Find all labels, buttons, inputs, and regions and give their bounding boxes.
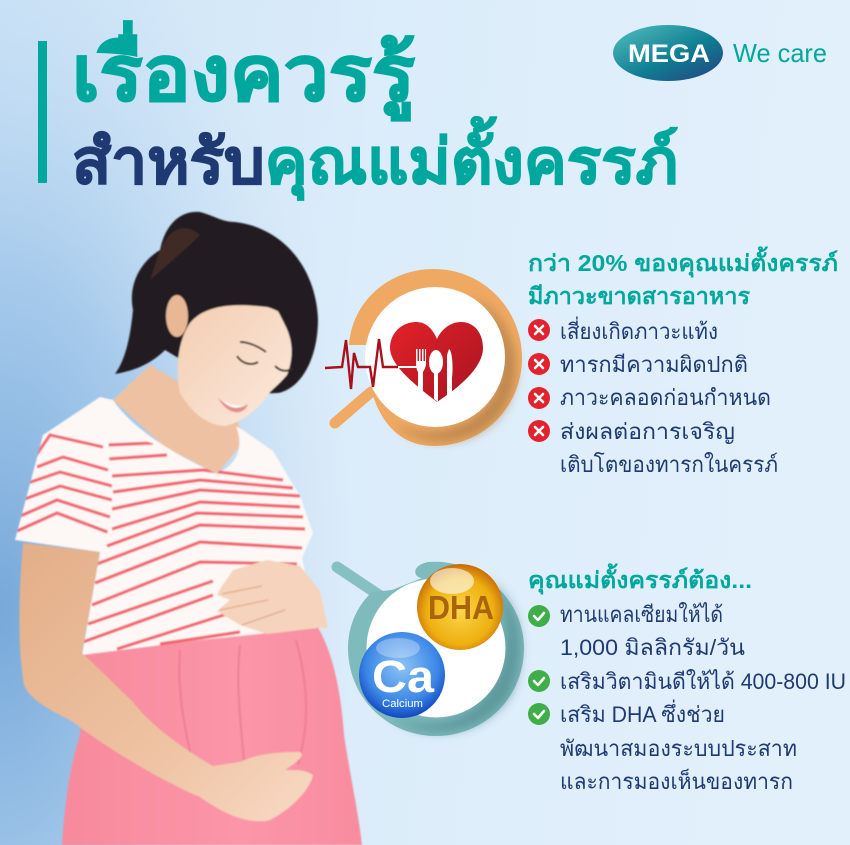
- vitamin D advice: เสริมวิตามินดีให้ได้ 400-800 IU: [560, 669, 846, 694]
- DHA advice: พัฒนาสมองระบบประสาท: [560, 736, 797, 761]
- facial features: [237, 342, 292, 371]
- title line 1: เรื่องควรรู้: [72, 20, 415, 121]
- teal ring with handle: [337, 567, 382, 597]
- arm and lower hand: [19, 543, 313, 821]
- icon: heart and nutrition circle: [325, 269, 522, 446]
- subheading: มีภาวะขาดสารอาหาร: [528, 283, 751, 309]
- hair: [115, 212, 318, 395]
- calcium advice: [528, 602, 745, 660]
- heartbeat line: [325, 339, 398, 389]
- fringe: [267, 278, 306, 393]
- calcium capsule: Calcium: [382, 698, 423, 710]
- white disc: [366, 578, 506, 718]
- DHA advice: [528, 699, 797, 794]
- ear: [166, 295, 188, 337]
- risk 4: [528, 419, 778, 477]
- DHA capsule: [417, 564, 503, 650]
- risk 1: เสี่ยงเกิดภาวะแท้ง: [560, 316, 718, 344]
- calcium advice: 1,000 มิลลิกรัม/วัน: [560, 635, 745, 660]
- calcium capsule: [359, 632, 445, 718]
- calcium capsule: Ca: [372, 651, 435, 702]
- logo: MEGA We care: [613, 25, 827, 81]
- orange ring with handle: [335, 392, 371, 423]
- cutlery: [416, 349, 453, 402]
- title: [38, 20, 678, 200]
- logo: MEGA We care: We care: [733, 38, 827, 68]
- heading: คุณแม่ตั้งครรภ์ต้อง...: [528, 563, 752, 595]
- title line 2: สำหรับคุณแม่ตั้งครรภ์: [72, 116, 678, 200]
- shirt: [15, 397, 317, 655]
- icon: DHA and calcium circle: [337, 562, 524, 736]
- risk 2: ทารกมีความผิดปกติ: [560, 352, 748, 377]
- white disc: [365, 287, 505, 427]
- heart: [390, 322, 483, 402]
- neck: [113, 365, 245, 474]
- logo: MEGA We care: MEGA: [628, 40, 710, 68]
- panel: nutrient deficiency risks: [528, 246, 838, 477]
- upper hand: [217, 560, 328, 634]
- panel: what mothers should do: [528, 563, 846, 794]
- illustration: pregnant woman: [15, 212, 362, 845]
- calcium advice: ทานแคลเซียมให้ได้: [560, 602, 723, 627]
- accent bar: [38, 41, 47, 183]
- DHA capsule: DHA: [428, 589, 494, 626]
- risk 4: ส่งผลต่อการเจริญ: [560, 419, 735, 444]
- face: [178, 305, 300, 426]
- risk 4: เติบโตของทารกในครรภ์: [560, 452, 778, 477]
- heading: กว่า 20% ของคุณแม่ตั้งครรภ์: [528, 246, 838, 278]
- DHA advice: และการมองเห็นของทารก: [560, 767, 793, 794]
- risk 3: ภาวะคลอดก่อนกำหนด: [560, 385, 771, 410]
- dress: [62, 626, 362, 845]
- DHA advice: เสริม DHA ซึ่งช่วย: [560, 699, 725, 727]
